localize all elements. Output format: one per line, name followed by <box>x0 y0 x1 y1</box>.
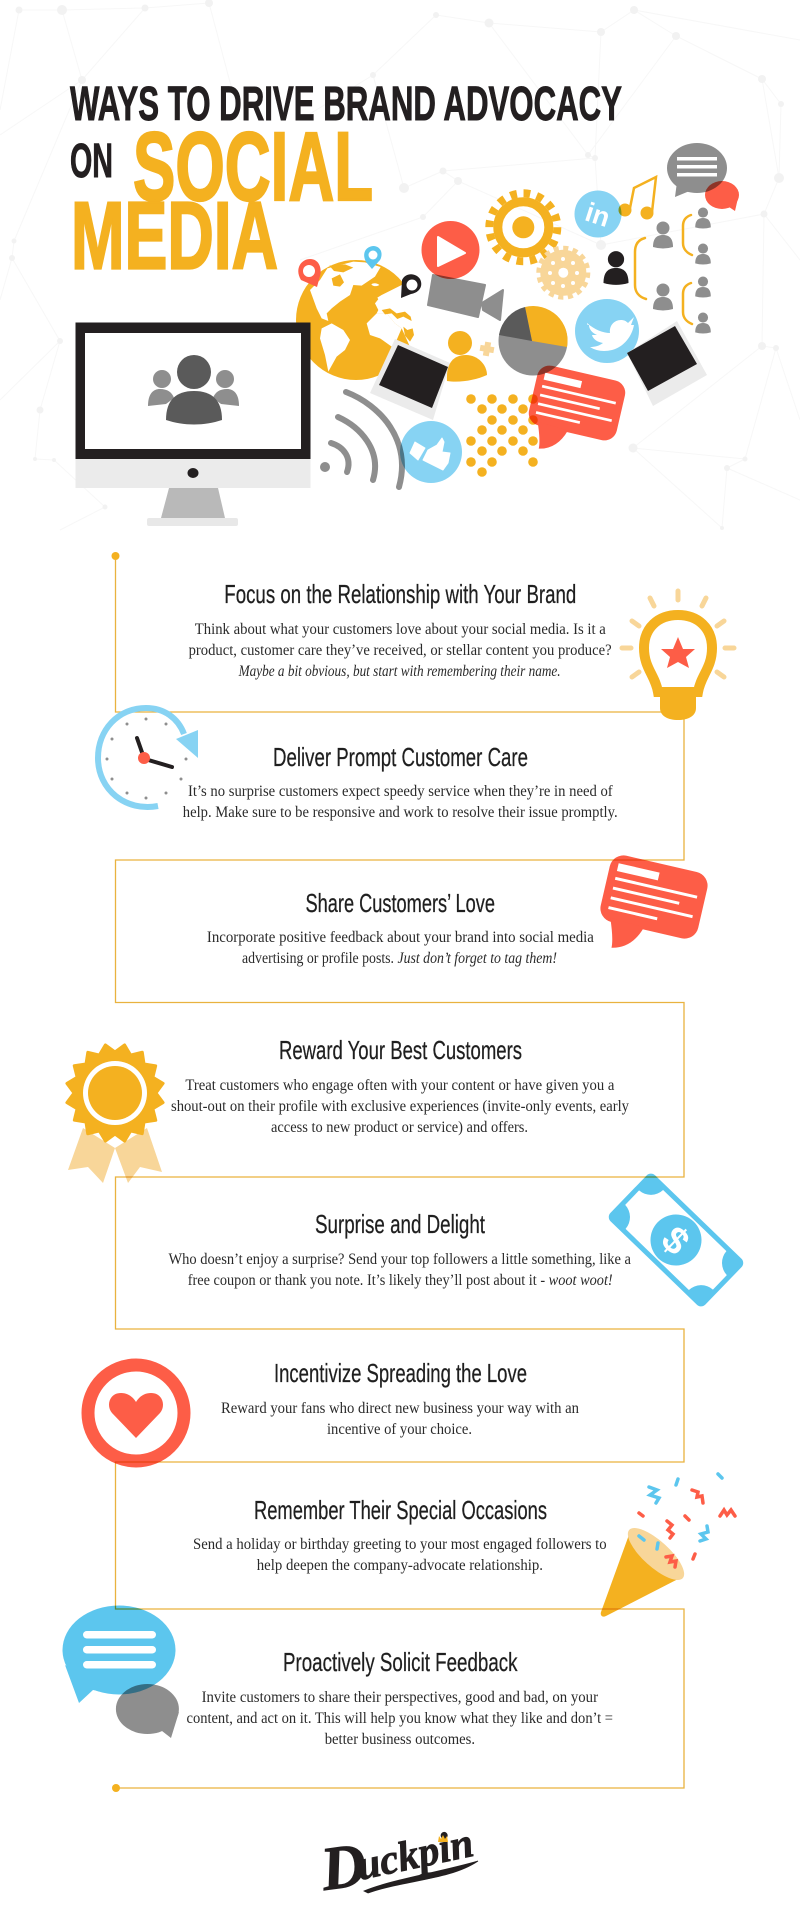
step path line <box>116 560 684 1788</box>
body text: Think about what your customers love about your social media. Is it a <box>195 621 606 638</box>
body text: Reward your fans who direct new business your way with an <box>221 1400 579 1417</box>
body text: help. Make sure to be responsive and work to resolve their issue promptly. <box>183 804 618 821</box>
icon: polaroid right <box>627 321 707 406</box>
icon: red chat bubble <box>705 181 739 211</box>
body text: advertising or profile posts. Just don’t forget to tag them! <box>242 950 557 967</box>
pin: red <box>298 259 321 287</box>
panel: surprise and delight <box>168 1171 746 1309</box>
body text: Treat customers who engage often with your content or have given you a <box>185 1077 614 1094</box>
panel: deliver prompt customer care <box>98 708 618 821</box>
body text: incentive of your choice. <box>327 1421 472 1438</box>
body text: Maybe a bit obvious, but start with remembering their name. <box>238 663 561 680</box>
icon: red feedback bubble <box>521 363 628 465</box>
path end dot <box>112 1784 120 1792</box>
icon: feedback speech bubble <box>592 853 710 966</box>
body text: content, and act on it. This will help you know what they like and don’t = <box>186 1710 613 1727</box>
body text <box>171 1077 629 1136</box>
icon: wifi signal <box>320 392 402 487</box>
body text <box>168 1251 631 1289</box>
body text: better business outcomes. <box>325 1731 475 1748</box>
panel: share customers' love <box>207 853 710 967</box>
icon: clock with arrow <box>98 708 198 807</box>
heading: Remember Their Special Occasions <box>254 1495 547 1525</box>
panel: proactively solicit feedback <box>62 1606 613 1748</box>
body text: It’s no surprise customers expect speedy service when they’re in need of <box>188 783 613 800</box>
icon: people group on screen <box>148 355 239 424</box>
icon: thumbs up badge <box>400 421 462 483</box>
icon: pale gear <box>539 249 587 297</box>
path start dot <box>112 552 120 560</box>
icon: polaroid left <box>370 339 450 420</box>
heading: Deliver Prompt Customer Care <box>273 742 528 772</box>
icon: party popper <box>601 1474 735 1617</box>
heading: Proactively Solicit Feedback <box>283 1647 518 1677</box>
pin: black <box>401 274 421 298</box>
body text: Invite customers to share their perspectives, good and bad, on your <box>202 1689 599 1706</box>
title word: on: ON <box>70 135 113 188</box>
body text: Send a holiday or birthday greeting to your most engaged followers to <box>193 1536 607 1553</box>
heading: Incentivize Spreading the Love <box>274 1358 527 1388</box>
icon: desktop monitor <box>76 322 310 526</box>
body text <box>189 621 612 680</box>
icon: video camera <box>428 275 503 320</box>
body text: product, customer care they’ve received, or stellar content you produce? <box>189 642 612 659</box>
body text <box>221 1400 579 1438</box>
icon: linkedin badge <box>574 190 622 238</box>
logo: duckpin <box>316 1820 478 1904</box>
heading: Share Customers’ Love <box>306 888 495 918</box>
icon: chat bubbles <box>62 1606 179 1738</box>
logo: duckpin: D <box>316 1831 371 1904</box>
icon: pie chart <box>498 306 568 376</box>
icon: globe with map pins <box>296 246 421 380</box>
icon: dot pattern <box>466 394 538 477</box>
logo crown <box>438 1835 448 1842</box>
pin: blue <box>364 246 382 269</box>
icon: music note <box>618 177 656 220</box>
body text: free coupon or thank you note. It’s likely they’ll post about it - woot woot! <box>188 1272 613 1289</box>
icon: linkedin badge: in <box>582 197 614 233</box>
background network pattern <box>0 0 800 530</box>
body text: help deepen the company-advocate relationship. <box>257 1557 543 1574</box>
body text: Who doesn’t enjoy a surprise? Send your top followers a little something, like a <box>168 1251 631 1268</box>
panel: reward your best customers <box>57 1035 629 1183</box>
title word: media: MEDIA <box>71 182 278 290</box>
body text <box>207 929 594 967</box>
logo: duckpin: uckpin <box>353 1820 478 1890</box>
title word: social: SOCIAL <box>133 112 373 221</box>
icon: heart in ring <box>88 1365 184 1461</box>
icon: referral tree <box>604 207 711 334</box>
body text <box>183 783 618 821</box>
icon: add user <box>447 331 495 382</box>
panel: remember their special occasions <box>193 1474 735 1617</box>
icon: award ribbon badge <box>57 1035 173 1183</box>
body text: Incorporate positive feedback about your brand into social media <box>207 929 594 946</box>
icon: dollar bill: $ <box>653 1219 697 1264</box>
icon: light bulb <box>622 591 734 720</box>
icon: twitter badge <box>575 299 639 363</box>
panel: focus on the relationship <box>189 579 734 720</box>
icon: video play button <box>422 221 480 279</box>
heading: Surprise and Delight <box>315 1209 486 1239</box>
body text: access to new product or service) and offers. <box>271 1119 528 1136</box>
body text: shout-out on their profile with exclusive experiences (invite-only events, early <box>171 1098 629 1115</box>
icon: orange gear <box>489 193 557 261</box>
icon: dollar bill <box>606 1171 746 1309</box>
panel: incentivize spreading the love <box>88 1358 579 1461</box>
title <box>70 78 622 290</box>
icon: grey chat bubble <box>667 143 727 197</box>
body text <box>186 1689 613 1748</box>
heading: Focus on the Relationship with Your Brand <box>224 579 576 609</box>
heading: Reward Your Best Customers <box>279 1035 522 1065</box>
body text <box>193 1536 607 1574</box>
